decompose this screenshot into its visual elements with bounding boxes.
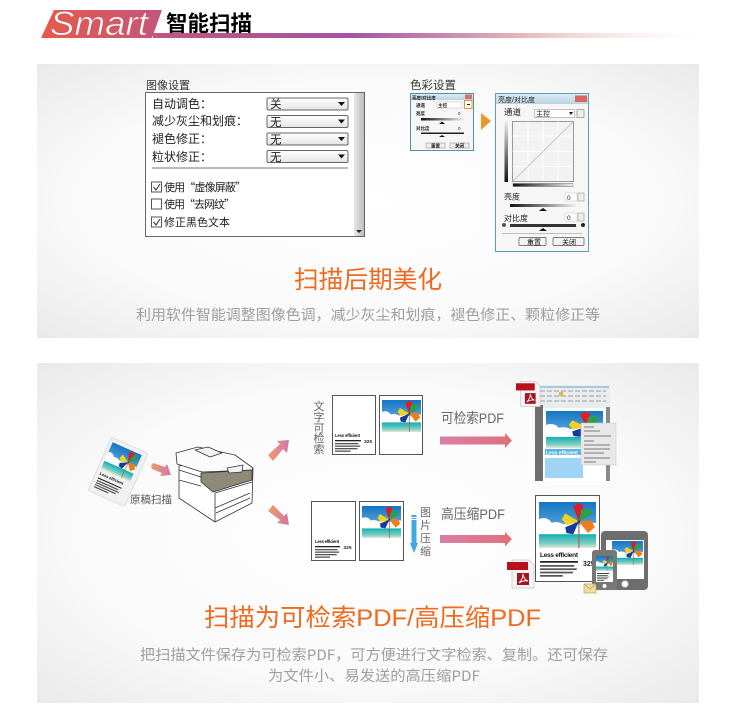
color settings small dialog: 0: [458, 126, 461, 131]
arrow: orange triangle: [481, 113, 491, 130]
color settings small dialog: [410, 78, 474, 150]
color settings small dialog: 亮度: [416, 110, 425, 117]
icon: PDF: [507, 560, 534, 588]
panel description: 把扫描文件保存为可检索PDF，可方便进行文字检索、复制。还可保存: [140, 644, 608, 665]
compressed PDF row: [312, 496, 648, 593]
arrow: [440, 532, 512, 546]
image settings dialog: 自动调色：: [152, 95, 212, 112]
icon: envelope: [584, 584, 596, 593]
header gradient rule: [153, 33, 705, 38]
icon: phone: [592, 550, 617, 590]
vertical label: 文: [314, 399, 324, 413]
brightness and contrast dialog: 对比度: [504, 213, 528, 223]
vertical label: [420, 506, 431, 558]
arrow: up to searchable PDF: [268, 440, 289, 461]
vertical label: 索: [314, 442, 324, 456]
panel background: [37, 363, 699, 703]
panel description: 利用软件智能调整图像色调，减少灰尘和划痕，褪色修正、颗粒修正等: [136, 304, 600, 325]
image settings dialog: 粒状修正：: [152, 148, 212, 165]
brightness and contrast dialog: 亮度/对比度: [498, 95, 535, 104]
color settings small dialog: 重置: [431, 142, 440, 150]
image layer page: [379, 396, 424, 454]
panel description: [140, 644, 608, 686]
text layer page: Less efficient: [335, 433, 361, 438]
header title: 智能扫描: [166, 12, 252, 36]
text layer page: [312, 502, 356, 560]
color settings small dialog: 主控: [438, 102, 447, 108]
color settings small dialog: 0: [458, 111, 461, 116]
panel heading: 扫描为可检索PDF/高压缩PDF: [204, 604, 541, 632]
text layer page: Less efficient: [315, 539, 340, 544]
image settings dialog: 使用“去网纹”: [164, 196, 235, 212]
panel: post-scan enhancement: [37, 64, 699, 338]
text layer page: 325: [364, 439, 372, 445]
vertical label: 可: [314, 423, 324, 435]
brightness and contrast dialog: 关闭: [562, 238, 576, 246]
arrow: [440, 433, 512, 448]
image settings dialog: 图像设置: [146, 79, 190, 92]
section header: [41, 5, 705, 43]
brightness and contrast dialog: 通道: [504, 107, 522, 117]
arrow: down to compressed PDF: [268, 505, 289, 525]
image settings dialog: 减少灰尘和划痕：: [152, 112, 248, 129]
vertical label: 缩: [420, 545, 431, 558]
original document: Less efficient: [99, 471, 125, 486]
text layer page: 325: [344, 545, 352, 551]
color settings small dialog: 关闭: [455, 142, 464, 150]
brightness and contrast dialog: [496, 94, 588, 252]
vertical label: 图: [420, 506, 431, 519]
panel: scan to searchable and compressed PDF: [37, 363, 699, 703]
brightness and contrast dialog: 0: [567, 195, 571, 202]
label: 可检索PDF: [441, 410, 504, 426]
panel background: [37, 64, 699, 338]
PDF reader window: Less efficient: [546, 450, 578, 456]
original document: 原稿扫描: [130, 493, 172, 506]
color settings small dialog: 对比度: [416, 125, 430, 132]
icon: tablet: [601, 531, 648, 590]
image settings dialog: 修正黑色文本: [164, 214, 230, 230]
image layer page: [359, 502, 404, 560]
compressed page: Less efficient: [540, 552, 579, 559]
Smart badge: Smart: [50, 5, 150, 43]
arrow: into printer: [151, 463, 171, 476]
text layer page: [332, 396, 376, 454]
image settings dialog: [146, 79, 364, 236]
PDF reader window: [535, 385, 616, 481]
color settings small dialog: 通道: [416, 102, 425, 109]
image settings dialog: 使用“虚像屏蔽”: [164, 179, 246, 195]
vertical label: 检: [314, 431, 324, 445]
image settings dialog: 无: [270, 152, 282, 164]
arrow: compression: [410, 515, 418, 553]
vertical label: 片: [420, 519, 431, 532]
panel heading: 扫描后期美化: [294, 266, 442, 294]
image settings dialog: 褪色修正：: [152, 130, 212, 147]
vertical label: [314, 399, 324, 456]
brightness and contrast dialog: 主控: [536, 109, 550, 118]
icon: multifunction printer: [176, 447, 253, 522]
brightness and contrast dialog: 0: [567, 215, 571, 222]
image settings dialog: 无: [270, 117, 282, 129]
vertical label: 字: [314, 410, 324, 424]
compressed page: 325: [583, 561, 595, 568]
brightness and contrast dialog: 重置: [527, 238, 541, 246]
image settings dialog: 关: [270, 97, 282, 111]
brightness and contrast dialog: 亮度: [504, 192, 520, 202]
label: 高压缩PDF: [441, 506, 505, 522]
icon: PDF: [516, 382, 540, 406]
original document: [88, 437, 172, 507]
searchable PDF row: [314, 382, 616, 481]
vertical label: 压: [420, 532, 431, 545]
panel description: 为文件小、易发送的高压缩PDF: [268, 665, 480, 686]
compressed page: [534, 496, 601, 582]
image settings dialog: 无: [270, 134, 282, 146]
color settings small dialog: 亮度/对比度: [412, 94, 436, 102]
color settings small dialog: 色彩设置: [410, 78, 456, 92]
